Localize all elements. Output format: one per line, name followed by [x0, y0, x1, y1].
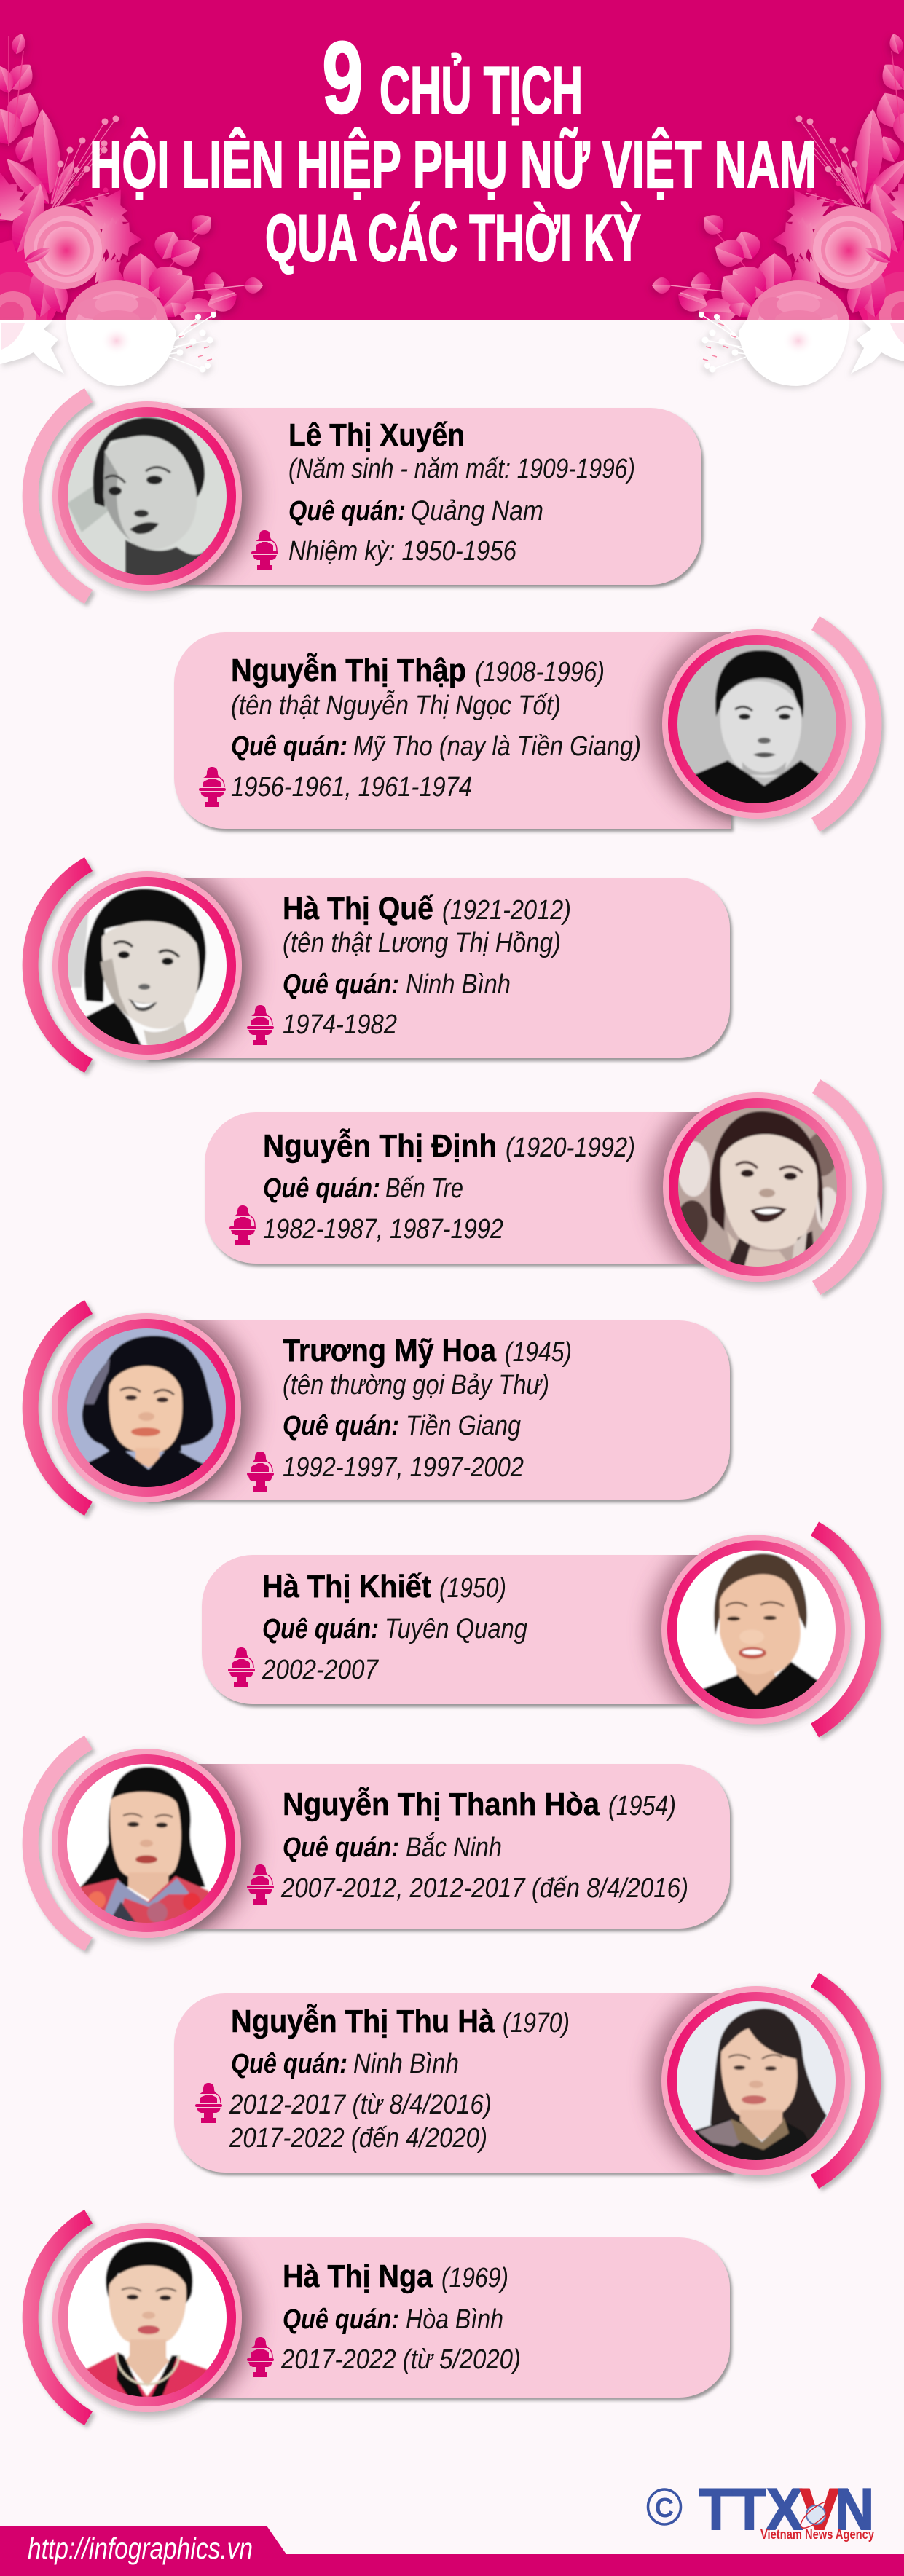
- agency letters: TTX: [699, 2477, 803, 2542]
- hometown: Ninh Bình: [406, 969, 511, 1000]
- name and years: Trương Mỹ Hoa: [283, 1333, 496, 1368]
- hometown: [263, 1173, 463, 1204]
- name: Lê Thị Xuyến: [288, 417, 465, 453]
- hometown: [283, 1832, 502, 1863]
- globe emblem: [797, 2497, 835, 2532]
- name and years: [283, 891, 571, 926]
- panel: Nguyễn Thị Định: [205, 1079, 882, 1295]
- real name: (tên thật Nguyễn Thị Ngọc Tốt): [231, 689, 561, 721]
- term: 2002-2007: [262, 1655, 380, 1685]
- icon: speaker at podium: [247, 1864, 274, 1905]
- icon: speaker at podium: [247, 2337, 274, 2377]
- panel: Lê Thị Xuyến: [23, 388, 701, 604]
- hometown: Quê quán:: [283, 1832, 399, 1863]
- agency letters: N: [835, 2477, 874, 2542]
- name and years: (1969): [441, 2263, 508, 2293]
- copyright mark: [648, 2489, 680, 2524]
- decorative arc: [23, 1300, 93, 1516]
- term: 2017-2022 (từ 5/2020): [280, 2344, 521, 2375]
- icon: speaker at podium: [229, 1205, 256, 1245]
- hometown: Quê quán:: [283, 2304, 399, 2335]
- name and years: (1954): [608, 1791, 676, 1821]
- panel: Trương Mỹ Hoa: [23, 1300, 730, 1516]
- hometown: [288, 496, 543, 527]
- portrait: [52, 1749, 241, 1938]
- hometown: Ninh Bình: [353, 2049, 459, 2079]
- term: Nhiệm kỳ: 1950-1956: [288, 536, 517, 567]
- name and years: (1921-2012): [442, 895, 571, 926]
- hometown: [231, 2049, 459, 2079]
- hometown: Quê quán:: [231, 2049, 347, 2079]
- name and years: (1970): [503, 2008, 570, 2039]
- name and years: Nguyễn Thị Thanh Hòa: [283, 1786, 600, 1822]
- icon: speaker at podium: [251, 530, 278, 570]
- hometown: [283, 2304, 503, 2335]
- name and years: Hà Thị Nga: [283, 2258, 433, 2294]
- hometown: Quê quán:: [231, 731, 347, 762]
- term 2: 2017-2022 (đến 4/2020): [229, 2123, 487, 2154]
- agency letters: [699, 2477, 874, 2542]
- title: [90, 20, 817, 275]
- title: CHỦ TỊCH: [380, 53, 583, 127]
- portrait: [663, 1092, 852, 1282]
- hometown: Tiền Giang: [406, 1411, 521, 1441]
- panel: Nguyễn Thị Thu Hà: [174, 1973, 881, 2189]
- icon: speaker at podium: [228, 1647, 255, 1687]
- name and years: Nguyễn Thị Thu Hà: [231, 2003, 495, 2039]
- portrait: [52, 1313, 241, 1502]
- hometown: Quê quán:: [288, 496, 406, 527]
- icon: speaker at podium: [247, 1452, 274, 1492]
- hometown: [283, 1411, 521, 1441]
- term 1: 2012-2017 (từ 8/4/2016): [229, 2089, 492, 2120]
- name and years: (1920-1992): [506, 1133, 635, 1163]
- hometown: [231, 731, 641, 762]
- portrait: [52, 2223, 242, 2412]
- term: 1956-1961, 1961-1974: [231, 772, 472, 803]
- panel: Hà Thị Khiết: [202, 1522, 881, 1738]
- hometown: Quê quán:: [283, 969, 399, 1000]
- decorative arc: [23, 857, 93, 1073]
- header band: [0, 0, 904, 401]
- name and years: [231, 652, 605, 688]
- hometown: [283, 969, 511, 1000]
- hometown: Quảng Nam: [411, 496, 543, 527]
- footer band: [0, 2526, 904, 2576]
- decorative arc: [23, 1736, 93, 1951]
- hometown: [262, 1614, 527, 1645]
- panel: Nguyễn Thị Thập: [174, 616, 881, 832]
- name and years: (1908-1996): [475, 657, 605, 688]
- panel: Hà Thị Nga: [23, 2210, 730, 2425]
- copyright mark: C: [655, 2493, 674, 2524]
- name and years: Hà Thị Quế: [283, 891, 433, 926]
- icon: speaker at podium: [247, 1005, 274, 1045]
- footer url: http://infographics.vn: [28, 2532, 253, 2565]
- icon: speaker at podium: [195, 2083, 222, 2123]
- decorative arc: [23, 388, 93, 604]
- logo: TTXVN: [648, 2477, 874, 2542]
- agency name: Vietnam News Agency: [760, 2527, 874, 2542]
- portrait: [662, 629, 852, 819]
- hometown: Bắc Ninh: [406, 1832, 502, 1863]
- portrait: [661, 1535, 851, 1725]
- hometown: Tuyên Quang: [385, 1614, 527, 1645]
- term: 1974-1982: [283, 1009, 397, 1040]
- hometown: Quê quán:: [262, 1614, 379, 1645]
- decorative arc: [23, 2210, 93, 2425]
- hometown: Quê quán:: [263, 1173, 380, 1204]
- name and years: [263, 1127, 635, 1164]
- decorative arc: [811, 1973, 881, 2189]
- portrait: [52, 401, 242, 591]
- decorative arc: [811, 616, 881, 832]
- icon: speaker at podium: [199, 767, 226, 807]
- hometown: Quê quán:: [283, 1411, 399, 1441]
- decorative arc: [812, 1079, 882, 1295]
- name and years: (1950): [439, 1573, 506, 1604]
- name and years: Nguyễn Thị Định: [263, 1127, 497, 1164]
- panel: Hà Thị Quế: [23, 857, 730, 1073]
- term: 2007-2012, 2012-2017 (đến 8/4/2016): [280, 1873, 688, 1904]
- hometown: Hòa Bình: [406, 2304, 503, 2335]
- term: 1992-1997, 1997-2002: [283, 1452, 524, 1483]
- name and years: Nguyễn Thị Thập: [231, 652, 466, 688]
- hometown: Bến Tre: [385, 1173, 463, 1204]
- title: 9: [322, 20, 363, 135]
- agency letters: V: [800, 2477, 839, 2542]
- title: QUA CÁC THỜI KỲ: [265, 202, 641, 275]
- panel: Nguyễn Thị Thanh Hòa: [23, 1736, 730, 1951]
- real name: (tên thật Lương Thị Hồng): [283, 928, 561, 958]
- portrait: [52, 871, 242, 1060]
- common name: (tên thường gọi Bảy Thư): [283, 1370, 549, 1401]
- name and years: (1945): [505, 1337, 572, 1368]
- term: 1982-1987, 1987-1992: [263, 1214, 503, 1245]
- portrait: [661, 1986, 851, 2175]
- decorative arc: [811, 1522, 881, 1738]
- years: (Năm sinh - năm mất: 1909-1996): [288, 454, 635, 484]
- name and years: Hà Thị Khiết: [262, 1569, 431, 1604]
- hometown: Mỹ Tho (nay là Tiền Giang): [353, 731, 641, 762]
